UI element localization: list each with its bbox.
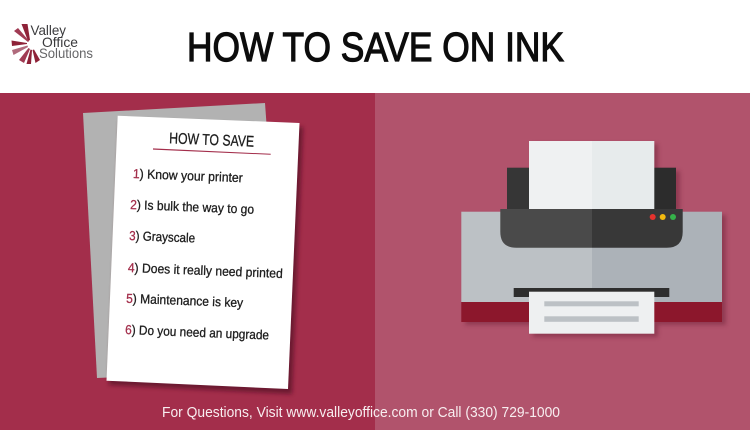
- panel: left maroon: [0, 93, 375, 430]
- list item 2: 2) Is bulk the way to go: [130, 197, 254, 217]
- back paper sheet: [83, 103, 272, 378]
- panel: checklist sheet: [106, 116, 300, 389]
- title: HOW TO SAVE ON INK: [187, 24, 564, 70]
- icon: printer: [461, 141, 726, 337]
- logo wordmark: Valley: [30, 22, 66, 38]
- input paper: [529, 141, 592, 209]
- list item 6: 6) Do you need an upgrade: [125, 322, 269, 343]
- checklist heading: HOW TO SAVE: [169, 130, 254, 151]
- icon: logo starburst: [12, 24, 40, 64]
- list item 4: 4) Does it really need printed: [128, 260, 283, 281]
- logo: Valley Office Solutions: [12, 22, 93, 64]
- output slot: [514, 288, 669, 297]
- logo wordmark: Solutions: [39, 45, 93, 61]
- list item 3: 3) Grayscale: [129, 228, 195, 246]
- footer contact line: For Questions, Visit www.valleyoffice.com or Call (330) 729-1000: [162, 404, 560, 421]
- list item 1: 1) Know your printer: [133, 166, 244, 185]
- heading underline: [153, 148, 271, 155]
- logo wordmark: Office: [42, 34, 78, 50]
- output paper: [529, 292, 654, 334]
- printer red base: [461, 302, 722, 322]
- panel: right rose: [375, 93, 750, 430]
- header band: [0, 0, 750, 93]
- front paper shadow: [109, 120, 303, 394]
- status lights: [650, 214, 676, 220]
- printer shadows: [465, 144, 726, 337]
- printer body: [461, 212, 592, 302]
- printer rear tray: [507, 168, 592, 210]
- logo wordmark: [30, 22, 93, 61]
- output paper lines: [544, 301, 639, 322]
- printer head: [500, 209, 592, 248]
- list item 5: 5) Maintenance is key: [126, 291, 244, 310]
